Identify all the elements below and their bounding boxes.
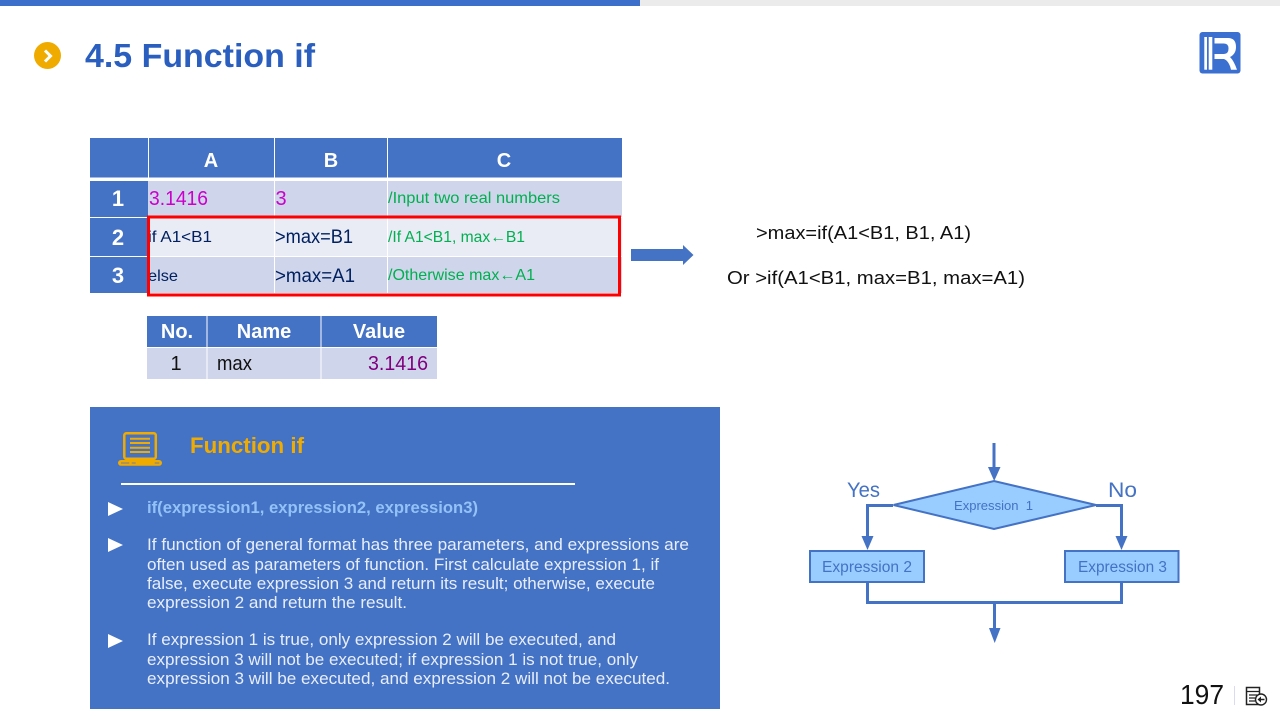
table row 3: 3	[112, 263, 124, 288]
panel heading: Function if	[190, 433, 305, 458]
bullet: general format: false, execute expression 3 and return its result; otherwise, execute	[147, 574, 655, 593]
table row 1: /Input two real numbers	[388, 190, 560, 207]
variable table: 3.1416	[368, 353, 428, 375]
arrow: no branch	[1096, 506, 1128, 550]
panel: function if description	[90, 407, 720, 709]
box: expression 3: Expression 3	[1078, 559, 1167, 576]
code text: equivalent expressions: >max=if(A1<B1, B1, A1)	[756, 223, 971, 243]
red highlight box	[148, 217, 620, 295]
table row 3: else	[148, 268, 178, 285]
decision diamond: Expression 1	[954, 498, 1033, 513]
table row 2: 2	[112, 225, 124, 250]
code text: equivalent expressions: Or >if(A1<B1, max=B1, max=A1)	[727, 268, 1025, 288]
arrow: right	[631, 245, 694, 265]
variable table: max	[217, 353, 252, 375]
variable table: Name	[237, 321, 291, 343]
table row 1: 1	[112, 186, 124, 211]
variable table: No.	[161, 321, 193, 343]
variable table: Value	[353, 321, 405, 343]
box: expression 2	[810, 551, 924, 582]
arrow: flow exit	[989, 602, 1000, 643]
table header row: C	[497, 150, 511, 172]
code text: equivalent expressions	[727, 223, 1025, 288]
bullet: general format: often used as parameters of function. First calculate expression 1, if	[147, 555, 659, 574]
table row 3	[90, 257, 622, 293]
table row 3: /Otherwise max←A1	[388, 267, 535, 284]
arrow: yes branch	[862, 506, 893, 550]
decision diamond	[894, 481, 1096, 529]
top progress bar	[0, 0, 1280, 6]
variable table	[147, 316, 437, 379]
table row 1: 3.1416	[149, 188, 208, 210]
title: 4.5 Function if	[85, 37, 316, 74]
icon: orange chevron bullet	[34, 42, 61, 69]
page number: 197	[1180, 679, 1224, 710]
bullet: evaluation rule: expression 3 will not be executed; if expression 1 is not true, only	[147, 650, 638, 669]
bullet: general format: expression 2 and return the result.	[147, 593, 407, 612]
bullet: general format	[108, 535, 689, 612]
table row 1: 3	[276, 188, 287, 210]
icon: back to contents	[1246, 688, 1266, 705]
table header row: B	[324, 150, 338, 172]
table row 3: >max=A1	[275, 266, 355, 287]
connector: merge	[868, 582, 1122, 602]
arrow: flow entry	[988, 443, 1000, 481]
table row 2: >max=B1	[275, 227, 353, 248]
bullet: evaluation rule	[108, 630, 670, 688]
variable table: 1	[170, 353, 182, 375]
cellset table	[90, 138, 622, 293]
label: yes: Yes	[847, 479, 880, 502]
table row 2: /If A1<B1, max←B1	[388, 229, 525, 246]
icon: company logo	[1200, 32, 1240, 74]
table header row: A	[204, 150, 218, 172]
icon: laptop	[118, 433, 162, 466]
footer divider	[1234, 686, 1235, 705]
table header row	[90, 138, 622, 178]
flowchart	[810, 443, 1178, 643]
box: expression 2: Expression 2	[822, 559, 912, 576]
bullet: evaluation rule: If expression 1 is true, only expression 2 will be executed, and	[147, 630, 616, 649]
box: expression 3	[1065, 551, 1178, 582]
divider line	[121, 483, 575, 485]
bullet: syntax: if(expression1, expression2, expression3)	[147, 498, 478, 517]
table row 2	[90, 218, 622, 256]
bullet: evaluation rule: expression 3 will be executed, and expression 2 will not be executed.	[147, 669, 670, 688]
bullet: general format: If function of general format has three parameters, and expressions are	[147, 535, 689, 554]
table row 2: if A1<B1	[148, 229, 212, 246]
table row 1	[90, 181, 622, 217]
label: no: No	[1108, 479, 1137, 502]
